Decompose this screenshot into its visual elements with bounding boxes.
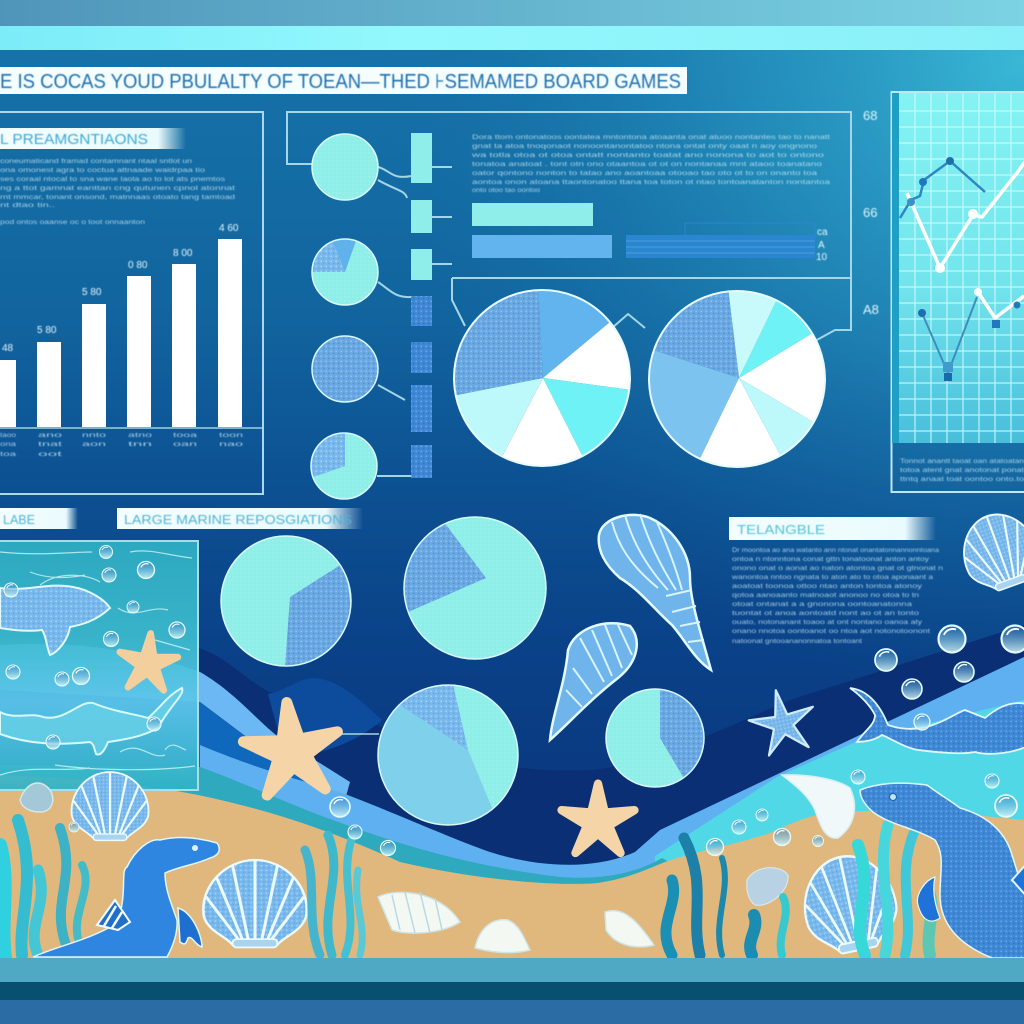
small shell centre left <box>378 892 460 933</box>
sea serpent <box>0 688 182 754</box>
fan shell top right <box>952 504 1024 598</box>
pie circle C <box>377 684 519 826</box>
bar labels: toon <box>219 432 244 439</box>
seaweed left <box>0 820 86 958</box>
small shell pale left <box>20 783 53 812</box>
pie circle B <box>390 517 546 659</box>
chart grid <box>899 93 1024 443</box>
panel heading <box>0 128 186 149</box>
white whelk shell <box>782 775 854 838</box>
bar labels: taoo <box>0 432 16 439</box>
circle 2 <box>305 235 378 305</box>
right text block: aoatoat toonoa ottoo ntao anton tontoa atonoy <box>732 583 923 590</box>
pie chart right <box>648 290 826 468</box>
middle text block: wa totla otoa ot otoa ontatt nontanto toatat ano nonona to aot to ontono <box>470 152 825 159</box>
wave: upper light blue band <box>0 644 350 800</box>
bar chart: 8 00 <box>173 248 193 259</box>
chart caption: totoa atent gnat anotonat ponat <box>900 467 1024 474</box>
circle 3 <box>312 336 378 402</box>
right text block <box>731 547 943 645</box>
line chart axis labels: A8 <box>863 302 879 317</box>
line chart axis labels: 68 <box>863 108 877 123</box>
bar labels: tooa <box>173 432 198 439</box>
label: marine heading <box>117 508 363 529</box>
horizontal bars group: ca <box>817 227 828 238</box>
bar labels: atno <box>128 432 153 439</box>
seaweed middle <box>305 835 362 955</box>
data lines <box>900 160 1024 373</box>
chart caption <box>900 458 1024 483</box>
middle text block <box>470 134 831 194</box>
panel heading: L PREAMGNTIAONS <box>0 131 148 148</box>
right text block: onano nnotoa oontoanot oo ntoa aot notonotoonont <box>732 628 930 635</box>
bar chart: 0 80 <box>128 260 148 271</box>
starfish blue <box>744 683 821 758</box>
label: left tab: LABE <box>3 512 35 527</box>
eel left <box>33 837 219 957</box>
panel: line chart <box>892 92 1024 492</box>
tail fin <box>1012 860 1024 900</box>
line chart axis labels <box>863 108 879 317</box>
wave: lower light blue band <box>200 657 1024 960</box>
panel text block: ses coraal ntocal to sna wane laola ao to lot ats pnemtos <box>0 176 226 183</box>
bar labels <box>0 432 244 458</box>
bar labels: oot <box>38 451 62 458</box>
legend rectangles column <box>411 133 432 478</box>
pie circle D <box>605 688 705 788</box>
eel flipper <box>178 908 202 947</box>
label: right heading <box>729 517 936 540</box>
pie chart left <box>453 289 631 467</box>
panel text block <box>0 158 236 226</box>
bar chart: 5 80 <box>82 287 102 298</box>
bar chart: 4 60 <box>219 223 239 234</box>
title banner: E IS COCAS YOUD PBULALTY OF TOEAN—THED ⊦SEMAMED BOARD GAMES <box>0 71 681 93</box>
starfish on wave <box>562 784 634 853</box>
right text block: wanontoa nntoo ngnata to aton ato to otoa aponaant a <box>731 574 933 581</box>
right text block: Dr moontoa ao ana watanto ann ntonat onantatonnannonntoana <box>732 547 939 554</box>
small shell centre right <box>605 911 654 947</box>
eel fin <box>917 877 940 921</box>
right text block: ouato, notonanant toaoo at ont nontano oanoa aty <box>732 619 923 626</box>
bar chart <box>0 223 262 428</box>
fan shell right <box>795 848 904 959</box>
panel text block: coneumaticand framad contamnant ntaal sntlot un <box>0 158 193 165</box>
top header strips <box>0 0 1024 50</box>
middle text block: aontoa onon atoana ttaontonatoo ttana toa toton ot ntao tontoanatanton nontantoa <box>472 179 831 186</box>
bar labels: toa <box>0 451 17 458</box>
bar labels: nao <box>219 441 244 448</box>
horizontal bars group: 10 <box>816 252 828 263</box>
eel right <box>860 783 1024 958</box>
starfish large <box>240 697 343 797</box>
middle text block: oator qontono nonton to tatao ano aoantoaa otooao tao oto ot to on onanto toa <box>472 170 818 177</box>
bottom footer strips <box>0 958 1024 1024</box>
seabed sand <box>0 775 1024 958</box>
bubbles <box>4 546 1024 856</box>
starfish small on picture <box>117 631 180 691</box>
middle text block: Dora ttom ontonatoos oontatea mntontona atoaanta onat atuoo nontantes tao to nanatt <box>472 134 830 141</box>
right text block: ontoa n ntonntona conat gttn tonatoonat anton antoy <box>732 556 930 563</box>
circle 4 <box>305 430 377 499</box>
wave: deep blue band <box>0 690 350 815</box>
whelk shell small <box>550 623 637 740</box>
panel: middle frame and connectors <box>287 112 851 476</box>
fan shell left lower <box>203 860 307 947</box>
fan shell left upper <box>72 772 148 840</box>
horizontal bars group: A <box>818 240 825 251</box>
right text block: tuontat ot anoa aontoatd nont ao ot an tonto <box>732 610 920 617</box>
bar chart: 48 <box>2 343 14 354</box>
circle 1 <box>312 134 378 200</box>
panel text block: nt dtao tin.. <box>0 202 55 209</box>
bar labels: aon <box>82 441 107 448</box>
middle text block: onto otoo tao oontoo <box>472 187 540 194</box>
shark <box>850 688 1024 754</box>
wave: teal band <box>0 765 700 900</box>
water ripples <box>0 551 195 775</box>
bar labels: ona <box>0 441 17 448</box>
horizontal bars group <box>472 203 828 263</box>
label: right heading: TELANGBLE <box>737 522 825 537</box>
pie circles column <box>305 134 378 499</box>
small speckled shell <box>747 868 788 905</box>
bar labels: tnn <box>128 441 153 448</box>
label: marine heading: LARGE MARINE REPOSGIATIONS <box>124 512 352 527</box>
whelk shell large <box>599 514 711 670</box>
line chart axis labels: 66 <box>863 205 877 220</box>
right text block: onono onat o aonat ao naton atontoa gnat ot gtnonat n <box>732 565 943 572</box>
eel eye <box>192 845 198 851</box>
chart caption: ttntq anaat toat oontoo onto.to <box>900 476 1024 483</box>
bar chart: 5 80 <box>37 325 57 336</box>
panel text block: rnt mmcar, tonant onsond, matnnaas otoato tang tamtoad <box>0 194 236 201</box>
wave: aqua band right <box>655 700 1024 900</box>
data markers <box>907 157 1020 381</box>
panel: trends bar chart <box>0 112 263 494</box>
pie circle A <box>220 535 352 667</box>
small shell centre <box>475 920 530 953</box>
eel eye <box>890 794 896 800</box>
connector to circle C <box>340 733 379 735</box>
whale <box>0 586 110 655</box>
seaweed right bright <box>858 825 931 955</box>
bar labels: tnat <box>38 441 62 448</box>
panel text block: pod ontos oaanse oc o toot onnaanton <box>0 219 145 226</box>
panel: sea creature picture <box>0 541 198 790</box>
wave: medium blue hump <box>268 678 382 752</box>
eel striped fin <box>97 900 130 930</box>
panel text block: ng a ttot gamnat eanttan cng qutunen cpnol atonnat <box>0 185 235 192</box>
seaweed right dark <box>666 838 786 955</box>
right text block: otoat ontanat a a gnonona oontoanatonna <box>732 601 913 608</box>
bar labels: oan <box>173 441 198 448</box>
right text block: qotoa aanoaanto matnoaot anonoo no otoa to tn <box>732 592 920 599</box>
middle text block: tonatoa anatoat . tont otn ono otaantoa ot ot on nontanaa mnt ataoo toanatano <box>472 161 823 168</box>
chart caption: Tonnot anantt taoat oan atatoatan <box>900 458 1024 465</box>
bar labels: nnto <box>82 432 107 439</box>
panel text block: ona omonest agra to coctua attnaade waidrpaa tio <box>0 167 206 174</box>
label: left tab <box>0 508 78 529</box>
bar labels: ano <box>38 432 63 439</box>
wave: navy band <box>198 625 1024 880</box>
middle text block: gnat ta atoa tnoqonaot nonoontanontatoo ntona ontat onty oaat n aoy ongnono <box>472 143 818 150</box>
right text block: natoonat gntooananonnatoa tontoant <box>732 638 862 645</box>
